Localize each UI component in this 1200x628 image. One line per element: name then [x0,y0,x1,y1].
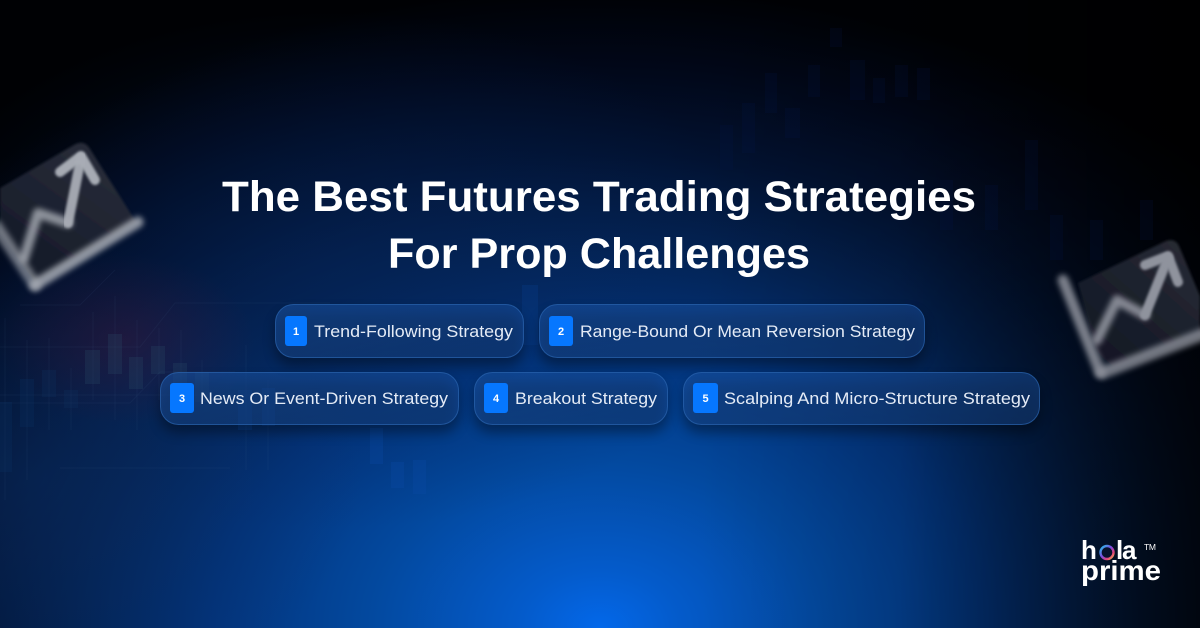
strategy pill 4: 4 [493,393,500,405]
strategy pill 5 [683,372,1040,433]
strategy pill 5: Scalping And Micro-Structure Strategy [724,389,1031,408]
candlestick chart: left [0,270,330,500]
candlestick chart: top right [720,28,1153,360]
strategy pill 2 [539,304,925,366]
icon: trend chart right [1063,240,1200,373]
strategy pill 3: News Or Event-Driven Strategy [200,389,449,408]
logo: hola prime: TM [1144,542,1156,552]
logo: hola prime: a [1122,535,1137,565]
title: The Best Futures Trading Strategies [222,173,976,221]
strategy pill 5: 5 [702,393,709,405]
logo: hola prime: prime [1081,555,1161,586]
strategy pill 3: 3 [179,393,185,405]
candlestick chart: centre [238,285,538,494]
strategy pill 2: Range-Bound Or Mean Reversion Strategy [580,322,916,341]
logo: hola prime [1081,535,1161,586]
strategy pill 1 [275,304,524,366]
strategy pill 2: 2 [558,326,564,338]
strategy pill 4 [474,372,668,433]
strategy pill 3 [160,372,459,433]
title: For Prop Challenges [388,230,810,278]
icon: trend chart left [0,143,138,285]
logo: hola prime: l [1116,535,1123,565]
strategy pill 1: Trend-Following Strategy [314,322,514,341]
strategy pill 4: Breakout Strategy [515,389,658,408]
logo: hola prime: h [1081,535,1097,565]
strategy pill 1: 1 [293,326,299,338]
title [222,173,976,278]
